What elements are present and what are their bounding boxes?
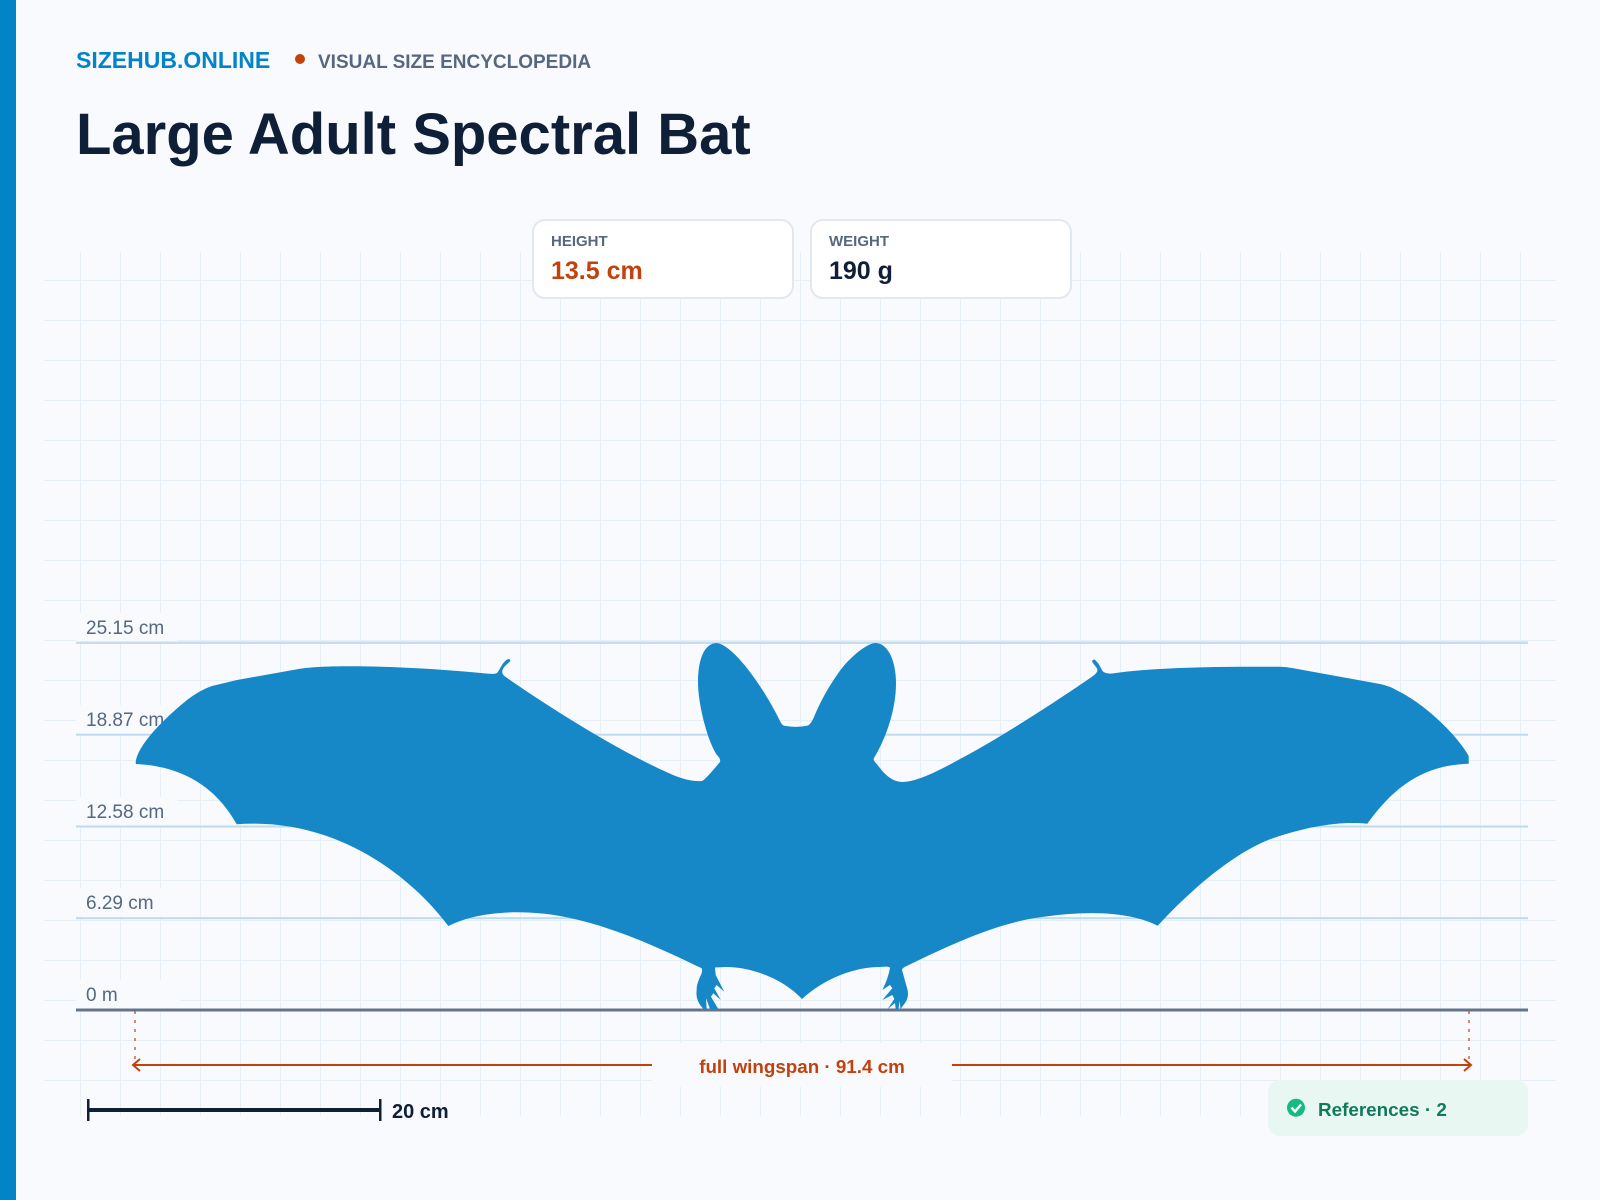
stat card: weight: WEIGHT xyxy=(829,233,889,250)
tick: 12.58 cm: 12.58 cm xyxy=(86,802,164,823)
header brand line xyxy=(76,47,591,73)
wingspan drop line: right xyxy=(1468,1011,1470,1063)
tick: 0 m: 0 m xyxy=(86,985,118,1006)
references badge xyxy=(1268,1080,1528,1136)
tick: 6.29 cm: 6.29 cm xyxy=(86,893,154,914)
tick: 0 m xyxy=(76,980,180,1009)
references badge: References · 2 xyxy=(1318,1099,1447,1120)
bat silhouette xyxy=(136,643,1469,1009)
wingspan label: full wingspan · 91.4 cm xyxy=(699,1056,905,1077)
wingspan dimension xyxy=(133,1011,1471,1087)
tick: 12.58 cm xyxy=(76,797,1528,828)
stat card: weight: 190 g xyxy=(829,257,893,285)
wingspan arrow xyxy=(133,1059,1471,1071)
brand name: SIZEHUB.ONLINE xyxy=(76,47,270,73)
stat card: height: HEIGHT xyxy=(551,233,608,250)
tick: 18.87 cm: 18.87 cm xyxy=(86,710,164,731)
icon: check xyxy=(1287,1099,1305,1117)
stat card: weight xyxy=(811,220,1071,298)
separator dot xyxy=(295,54,305,64)
left accent bar xyxy=(0,0,16,1200)
tick: 25.15 cm xyxy=(76,613,1528,644)
tick: 25.15 cm: 25.15 cm xyxy=(86,618,164,639)
wingspan drop line: left xyxy=(134,1011,136,1063)
wingspan label xyxy=(652,1043,952,1087)
ground line xyxy=(76,1008,1528,1012)
stat card: height: 13.5 cm xyxy=(551,257,643,285)
stat card: height xyxy=(533,220,793,298)
height scale ticks and labels xyxy=(76,613,1528,1009)
tick: 18.87 cm xyxy=(76,705,1528,736)
title: Large Adult Spectral Bat xyxy=(76,102,751,167)
scale bar: 20 cm xyxy=(392,1101,449,1123)
tick: 6.29 cm xyxy=(76,888,1528,919)
tagline: VISUAL SIZE ENCYCLOPEDIA xyxy=(318,52,591,73)
scale bar xyxy=(87,1099,449,1123)
